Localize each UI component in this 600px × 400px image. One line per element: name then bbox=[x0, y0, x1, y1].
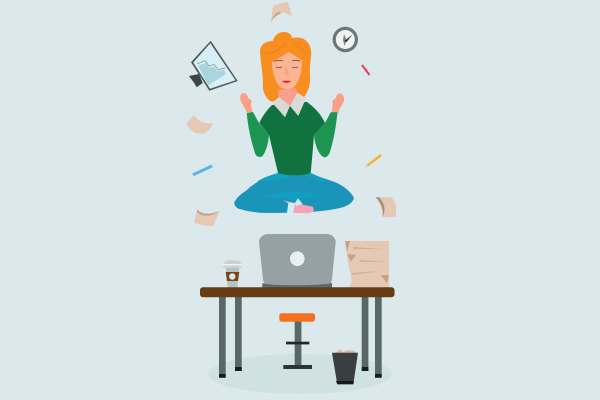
laptop bbox=[259, 234, 336, 288]
face bbox=[272, 52, 302, 89]
hair strands bbox=[271, 44, 303, 62]
paper: left bbox=[186, 115, 213, 134]
paper: right bbox=[376, 197, 396, 217]
coffee cup bbox=[223, 260, 242, 288]
paper stack bbox=[345, 241, 389, 288]
desk top bbox=[200, 287, 394, 297]
hair bbox=[260, 32, 311, 102]
desk bbox=[200, 287, 394, 378]
mouth bbox=[282, 81, 291, 83]
foot: light sock bbox=[287, 198, 303, 215]
eyebrows and eyes bbox=[274, 60, 300, 68]
right hand bbox=[332, 93, 344, 113]
leg highlights bbox=[258, 173, 328, 200]
pencil: yellow bbox=[366, 155, 381, 167]
waste bin bbox=[332, 349, 358, 384]
desk legs bbox=[219, 297, 382, 378]
icon: wall clock bbox=[333, 27, 358, 52]
pencil: blue bbox=[193, 165, 215, 175]
foot: pink sole bbox=[283, 200, 314, 213]
pencil: red bbox=[362, 65, 370, 75]
floor shadow bbox=[208, 354, 392, 394]
desk feet bbox=[219, 367, 382, 378]
monitor bbox=[189, 41, 238, 91]
paper: bottom left bbox=[194, 209, 219, 226]
left hand bbox=[240, 93, 253, 113]
neck bbox=[278, 88, 298, 108]
nose bbox=[284, 65, 289, 76]
paper: top bbox=[271, 2, 292, 22]
sweater bbox=[259, 102, 325, 176]
right arm bbox=[314, 112, 338, 157]
stool bbox=[279, 313, 315, 369]
collar bbox=[273, 94, 306, 117]
legs bbox=[234, 173, 354, 213]
left arm bbox=[247, 112, 269, 157]
woman bbox=[234, 32, 354, 215]
